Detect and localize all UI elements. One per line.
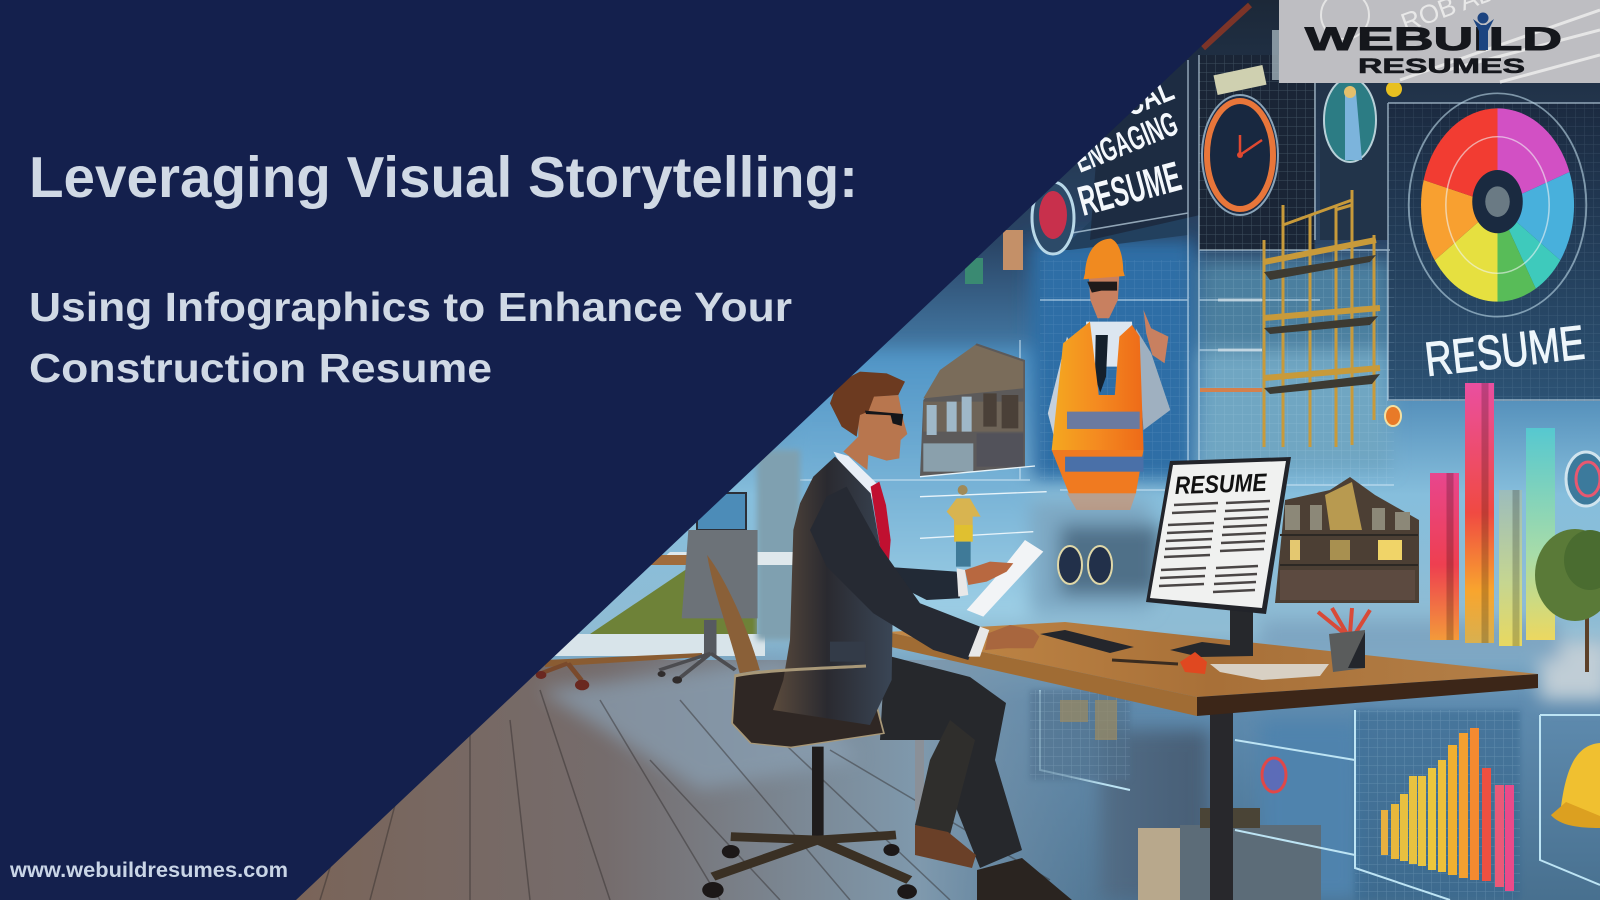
- scaffolding: [1200, 190, 1380, 447]
- subtitle: [29, 284, 792, 391]
- holographic dark panels: [800, 0, 1600, 490]
- bottom holographic panel: [1030, 690, 1600, 900]
- chair armrest: [735, 666, 866, 676]
- tie: [1095, 335, 1108, 393]
- logo backdrop: [1279, 0, 1600, 83]
- paper sheet: [967, 540, 1043, 617]
- monitor: [1146, 457, 1291, 657]
- logo wordmark top: WEBUILD: [1305, 21, 1562, 57]
- icon: person in logo: [1473, 12, 1494, 50]
- desk items: [1112, 608, 1370, 680]
- background office: grass and window: [545, 450, 800, 667]
- website url: www.webuildresumes.com: [9, 859, 288, 882]
- title: Leveraging Visual Storytelling:: [29, 146, 858, 210]
- construction worker in orange vest: [1048, 239, 1170, 450]
- desk leg: [1210, 712, 1233, 900]
- sleeve to keyboard hand: [810, 487, 980, 660]
- box under desk: [1138, 808, 1321, 900]
- icon: red badge lower: [1262, 758, 1286, 792]
- bar chart: lower hologram: [1381, 728, 1514, 891]
- floor shadow streak: [540, 660, 860, 790]
- keyboard: [1040, 630, 1134, 653]
- left sleeve: [1048, 337, 1082, 450]
- raised right sleeve and hand: [1136, 328, 1170, 430]
- vest reflective stripe: [1067, 412, 1140, 429]
- small worker figure: [947, 485, 981, 567]
- sunglasses: [865, 411, 903, 426]
- man shoes: [915, 825, 1072, 900]
- subtitle: Using Infographics to Enhance Your: [29, 284, 792, 330]
- keyboard hand: [985, 625, 1039, 650]
- screen heading: RESUME: [1174, 469, 1268, 500]
- paper hand: [965, 562, 1013, 585]
- small image tiles: [965, 230, 1023, 284]
- jacket pocket flap: [830, 642, 865, 662]
- man suit with head: [773, 372, 1043, 725]
- shirt collar: [833, 452, 877, 500]
- face: [1089, 273, 1119, 318]
- office chair: [702, 555, 917, 899]
- planks on floor: [320, 690, 1050, 900]
- floor: [290, 660, 1190, 900]
- man trousers: [880, 655, 1022, 868]
- tree: [1535, 529, 1600, 672]
- hair: [830, 372, 905, 437]
- background chair: [536, 530, 758, 690]
- monitor screen: [1150, 461, 1286, 608]
- monitor frame: [1146, 457, 1291, 614]
- left desk leg: [915, 725, 924, 810]
- sleeve to paper hand: [893, 567, 960, 600]
- vest: [1052, 322, 1144, 450]
- blurred wall tones: [790, 240, 1600, 900]
- logo box: [1279, 0, 1600, 83]
- subtitle: Construction Resume: [29, 345, 492, 391]
- icon: yellow hard hat: [1551, 743, 1600, 828]
- background building left: [920, 343, 1047, 538]
- desk: [887, 622, 1538, 716]
- neck and face: [843, 395, 907, 470]
- logo wordmark bottom: RESUMES: [1358, 55, 1525, 78]
- bar chart: tall bars: [1430, 383, 1555, 646]
- sunglasses: [1087, 282, 1117, 293]
- icon: figure in circle: [1324, 78, 1376, 162]
- headline on wall: engaging resume: RESUME: [1073, 152, 1186, 225]
- red tie: [871, 482, 891, 570]
- panel: navy diagonal: [0, 0, 1250, 900]
- background building right: [1275, 477, 1419, 603]
- headline on wall: engaging resume: [1069, 70, 1186, 225]
- icon: donut chart: [1409, 93, 1586, 317]
- icon: clock gauge: [1202, 95, 1278, 215]
- headline on wall: engaging resume: CAL: [1119, 70, 1179, 124]
- screen text lines: [1159, 501, 1270, 592]
- icon: ring target: [1566, 452, 1600, 506]
- circular wall icons: [1058, 546, 1112, 584]
- shirt: [1086, 322, 1134, 367]
- jacket torso: [773, 457, 893, 725]
- icon: orange pin: [1385, 406, 1401, 426]
- faint wall art behind logo: [1321, 0, 1600, 82]
- worker lower vest: [1052, 450, 1144, 510]
- headline on wall: engaging resume: ENGAGING: [1069, 105, 1183, 180]
- cuffs: [957, 568, 989, 657]
- monitor stand: [1170, 610, 1253, 657]
- icon: yellow dot: [1386, 81, 1402, 97]
- hard hat: [1083, 239, 1125, 279]
- icon: red badge: [1032, 182, 1074, 254]
